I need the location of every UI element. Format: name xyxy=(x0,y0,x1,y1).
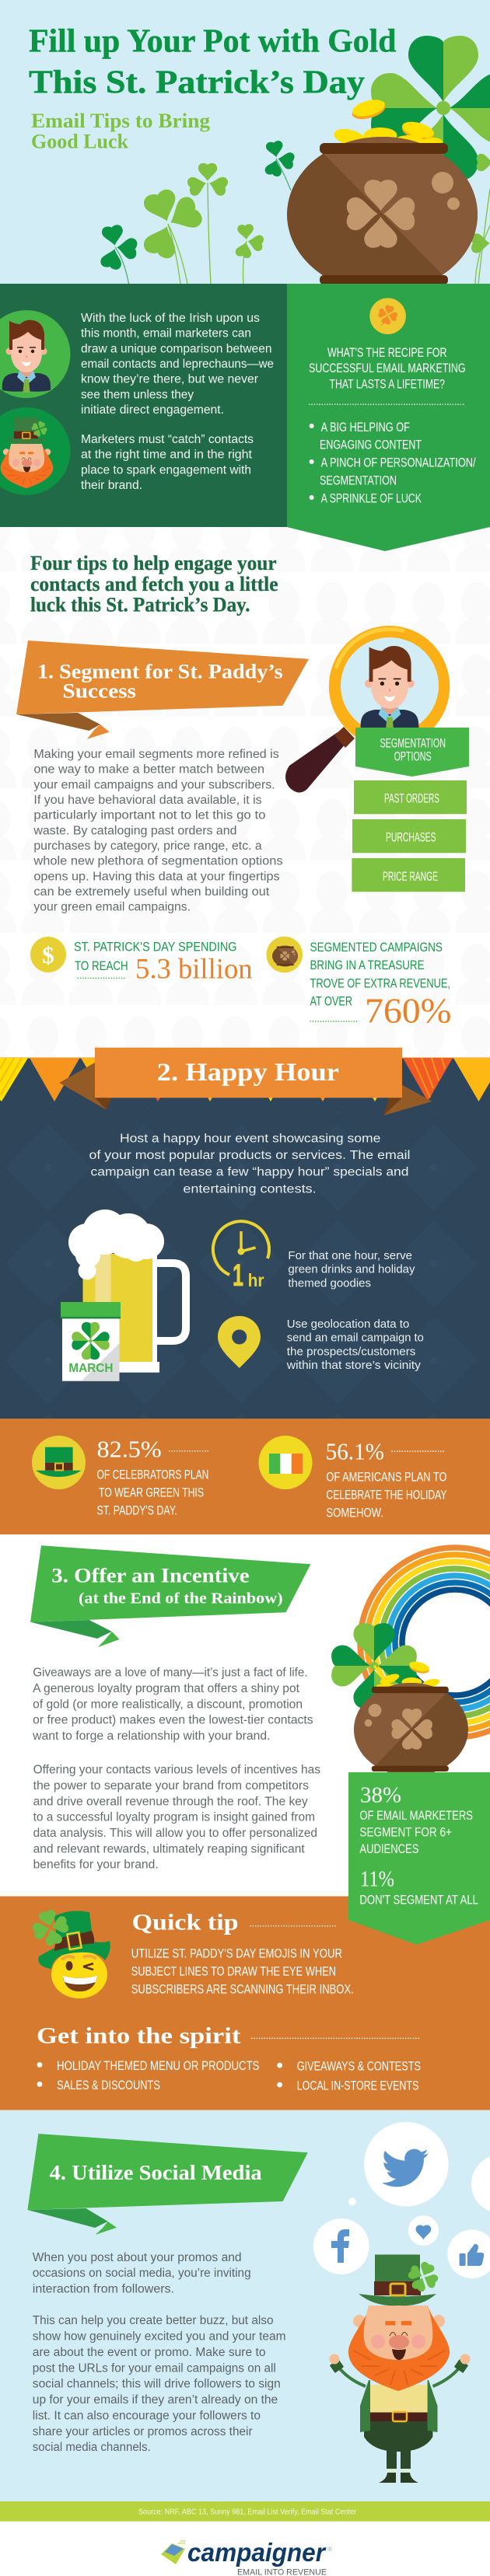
four tips heading xyxy=(30,552,278,616)
icon: heart bubble xyxy=(408,2215,439,2246)
ribbon: tip 2 heading xyxy=(59,1048,432,1115)
stat: 56.1% xyxy=(258,1436,446,1520)
panel: segmentation stats: SEGMENT FOR 6+ xyxy=(359,1825,452,1840)
option: purchases xyxy=(352,819,466,853)
icon: envelope xyxy=(161,2541,186,2564)
tip 1 body text xyxy=(33,748,283,914)
source strip: Source: NRF, ABC 13, Sunny 981, Email List Verify, Email Stat Center xyxy=(138,2508,357,2517)
ribbon: tip 1 heading: 1. Segment for St. Paddy’s xyxy=(37,661,283,683)
ribbon: tip 4 heading xyxy=(27,2134,308,2235)
stat: 82.5%: ST. PADDY'S DAY. xyxy=(96,1503,177,1517)
stat: 5.3 billion xyxy=(30,937,253,985)
option: price range xyxy=(352,858,465,892)
text: one hour: themed goodies xyxy=(288,1277,371,1290)
subtitle xyxy=(31,110,210,153)
title: Fill up Your Pot with Gold xyxy=(29,24,397,60)
bunting flags xyxy=(0,1058,490,1101)
text: geolocation: within that store’s vicinity xyxy=(286,1360,422,1372)
icon: one hour clock: hr xyxy=(248,1270,264,1290)
option: past orders: PAST ORDERS xyxy=(384,791,439,806)
intro text: see them unless they xyxy=(81,388,194,401)
get into the spirit xyxy=(37,2023,421,2093)
icon: green hat xyxy=(32,1436,86,1489)
stat: 5.3 billion: 5.3 billion xyxy=(135,953,253,985)
tip 4 body text: occasions on social media, you’re inviting xyxy=(33,2267,251,2280)
icon: winking emoji with hat xyxy=(30,1907,110,1998)
text: geolocation: the prospects/customers xyxy=(287,1346,415,1358)
avatar: marketer xyxy=(0,310,70,398)
panel: social media xyxy=(0,2110,490,2501)
ribbon: tip 2 heading: 2. Happy Hour xyxy=(157,1059,339,1087)
text: geolocation: send an email campaign to xyxy=(287,1332,424,1345)
stat: 5.3 billion: TO REACH xyxy=(75,958,128,973)
intro text: Marketers must “catch” contacts xyxy=(81,433,254,446)
tip 3 body text: benefits for your brand. xyxy=(33,1859,159,1872)
illustration: rainbow and pot xyxy=(331,1548,490,1776)
background pattern of silhouettes xyxy=(0,527,490,1058)
tip 4 body text: When you post about your promos and xyxy=(33,2251,242,2264)
recipe question: WHAT'S THE RECIPE FOR xyxy=(327,345,446,360)
tip 3 body text: or free product) makes even the lowest-tier contacts xyxy=(33,1714,313,1727)
title: This St. Patrick’s Day xyxy=(29,65,365,100)
tip 3 body text: to a successful loyalty program is insight gained from xyxy=(33,1811,315,1824)
stat: 760% xyxy=(266,937,451,1030)
text: one hour: green drinks and holiday xyxy=(288,1264,415,1276)
stat: 760%: BRING IN A TREASURE xyxy=(310,958,425,972)
campaigner logo: campaigner xyxy=(187,2538,327,2567)
options heading tag xyxy=(355,728,469,777)
four tips heading: Four tips to help engage your xyxy=(30,552,277,574)
tip 1 body text: particularly important not to let this go to xyxy=(33,809,266,822)
panel: segmentation stats: AUDIENCES xyxy=(359,1841,418,1856)
pot xyxy=(350,1678,468,1776)
tip 4 body text: interaction from followers. xyxy=(33,2282,174,2296)
tip 1 body text: Making your email segments more refined is xyxy=(33,748,279,761)
tip 4 body text: social channels; this will drive followers to sign xyxy=(33,2378,281,2391)
icon: march calendar: MARCH xyxy=(68,1362,113,1375)
tip 1 body text: purchases by category, price range, etc. a xyxy=(33,839,262,853)
recipe list: A BIG HELPING OF xyxy=(321,420,410,435)
icon: facebook bubble xyxy=(313,2218,369,2274)
rainbow xyxy=(360,1548,490,1737)
tip 2 intro text xyxy=(89,1132,411,1196)
stat: 56.1%: 56.1% xyxy=(326,1437,384,1464)
recipe list xyxy=(310,420,476,506)
panel: segmentation stats xyxy=(348,1772,490,1945)
tip 2 intro text: entertaining contests. xyxy=(183,1182,317,1196)
stat: 760%: 760% xyxy=(365,990,451,1030)
ribbon: tip 4 heading: 4. Utilize Social Media xyxy=(50,2161,262,2184)
get into the spirit: SALES & DISCOUNTS xyxy=(57,2078,160,2093)
tip 4 body text: up for your emails if they aren’t already on the xyxy=(33,2393,278,2407)
intro text: know they’re there, but we never xyxy=(81,373,258,386)
stat: 82.5% xyxy=(32,1435,208,1517)
icon: dollar coin xyxy=(30,937,66,972)
tip 2 intro text: campaign can tease a few “happy hour” specials and xyxy=(90,1166,409,1179)
text: geolocation: Use geolocation data to xyxy=(287,1318,409,1331)
ribbon: tip 3 heading: (at the End of the Rainbow) xyxy=(79,1590,283,1607)
text: geolocation xyxy=(286,1318,424,1372)
get into the spirit: LOCAL IN-STORE EVENTS xyxy=(297,2079,418,2093)
intro text: initiate direct engagement. xyxy=(81,403,224,417)
tip 3 body text: and relevant rewards, ultimately reaping significant xyxy=(33,1842,305,1855)
option: past orders xyxy=(354,780,467,814)
tip 3 body text: A generous loyalty program that offers a shiny pot xyxy=(33,1682,300,1695)
tip 1 body text: can be extremely useful when building out xyxy=(33,885,270,899)
pot of gold xyxy=(287,129,484,292)
panel: happy hour xyxy=(0,1048,490,1419)
small shamrocks xyxy=(100,140,490,284)
four tips heading: contacts and fetch you a little xyxy=(30,573,278,595)
tip 4 body text: list. It can also encourage your followers to xyxy=(33,2409,261,2422)
recipe list: SEGMENTATION xyxy=(320,473,397,488)
clover xyxy=(331,1623,417,1709)
panel: segmentation stats: 38% xyxy=(360,1783,401,1807)
icon: thumbs up bubble xyxy=(447,2229,490,2278)
recipe question: THAT LASTS A LIFETIME? xyxy=(330,377,445,392)
tip 2 intro text: Host a happy hour event showcasing some xyxy=(120,1132,380,1145)
stat: 56.1%: CELEBRATE THE HOLIDAY xyxy=(326,1487,446,1502)
subtitle: Email Tips to Bring xyxy=(31,110,210,132)
option: purchases: PURCHASES xyxy=(386,829,436,844)
tip 1 body text: If you have behavioral data available, it is xyxy=(33,794,262,807)
recipe list: ENGAGING CONTENT xyxy=(320,438,422,452)
tip 1 body text: one way to make a better match between xyxy=(33,763,264,777)
icon: dollar coin: $ xyxy=(42,941,54,969)
ribbon: tip 3 heading xyxy=(30,1545,310,1647)
tip 3 body text: of gold (or more realistically, a discount, promotion xyxy=(33,1698,303,1711)
intro text: draw a unique comparison between xyxy=(81,342,272,355)
get into the spirit: HOLIDAY THEMED MENU OR PRODUCTS xyxy=(57,2058,260,2073)
segmentation options xyxy=(352,728,469,892)
stat: 760%: AT OVER xyxy=(310,993,352,1008)
stat: 82.5%: OF CELEBRATORS PLAN xyxy=(96,1467,208,1482)
tip 4 body text: post the URLs for your email campaigns on all xyxy=(33,2361,276,2375)
options heading tag: OPTIONS xyxy=(394,749,432,763)
get into the spirit: Get into the spirit xyxy=(37,2023,240,2049)
icon: one hour clock: 1 xyxy=(233,1258,243,1293)
tip 4 body text: share your articles or promos across their xyxy=(33,2425,253,2438)
intro text: at the right time and in the right xyxy=(81,449,253,462)
four tips heading: luck this St. Patrick’s Day. xyxy=(30,594,250,616)
intro panel: left xyxy=(0,284,287,527)
quick tip: SUBJECT LINES TO DRAW THE EYE WHEN xyxy=(131,1964,336,1979)
intro text xyxy=(81,312,274,492)
icon: location pin xyxy=(218,1316,261,1368)
tip 4 body text: This can help you create better buzz, but also xyxy=(33,2314,274,2327)
intro text: email contacts and leprechauns—we xyxy=(81,358,274,371)
tip 3 body text: Giveaways are a love of many—it’s just a fact of life. xyxy=(33,1667,308,1680)
tip 3 body text: want to forge a relationship with your brand. xyxy=(32,1730,270,1743)
intro text: this month, email marketers can xyxy=(81,327,251,340)
tip 3 body text: the power to separate your brand from competitors xyxy=(33,1779,309,1792)
illustration: leprechaun xyxy=(330,2254,470,2483)
tip 1 body text: whole new plethora of segmentation options xyxy=(33,855,283,868)
tip 4 body text: are about the event or promo. Make sure to xyxy=(33,2346,266,2359)
subtitle: Good Luck xyxy=(31,131,129,153)
intro panel: recipe xyxy=(287,284,490,551)
tip 4 body text xyxy=(33,2251,286,2454)
source strip xyxy=(0,2501,490,2522)
ribbon: tip 1 heading xyxy=(16,641,309,739)
tip 1 body text: your email campaigns and your subscribers. xyxy=(33,778,275,791)
coins xyxy=(374,1660,440,1690)
title xyxy=(29,24,397,100)
ribbon: tip 1 heading: Success xyxy=(62,680,136,703)
icon: gold clover coin xyxy=(369,298,406,334)
recipe list: A SPRINKLE OF LUCK xyxy=(321,491,422,506)
intro text: With the luck of the Irish upon us xyxy=(81,312,260,325)
icon: magnifying glass xyxy=(285,626,450,793)
tip 3 body text: data analysis. This will allow you to offer personalized xyxy=(33,1827,317,1840)
icon: twitter bubble xyxy=(364,2122,449,2206)
options heading tag: SEGMENTATION xyxy=(380,736,446,751)
icon: march calendar xyxy=(61,1302,121,1381)
text: one hour xyxy=(288,1250,415,1290)
option: price range: PRICE RANGE xyxy=(383,869,438,884)
icon: one hour clock xyxy=(213,1221,269,1293)
tip 3 body text xyxy=(32,1667,320,1872)
tip 4 body text: show how genuinely excited you and your team xyxy=(33,2330,286,2344)
recipe question xyxy=(309,345,466,392)
icon: pot coin xyxy=(266,937,303,972)
get into the spirit: GIVEAWAYS & CONTESTS xyxy=(297,2059,421,2074)
quick tip: UTILIZE ST. PADDY'S DAY EMOJIS IN YOUR xyxy=(131,1946,342,1961)
decorative bubble at edge xyxy=(471,2155,490,2214)
tip 2 intro text: of your most popular products or services. The email xyxy=(89,1149,411,1162)
tip 3 body text: Offering your contacts various levels of incentives has xyxy=(33,1764,320,1777)
campaigner logo xyxy=(161,2538,332,2576)
stat: 82.5%: 82.5% xyxy=(96,1435,162,1462)
quick tip: SUBSCRIBERS ARE SCANNING THEIR INBOX. xyxy=(131,1982,354,1997)
quick tip: Quick tip xyxy=(132,1909,239,1935)
tip 1 body text: waste. By cataloging past orders and xyxy=(33,824,237,837)
tip 1 body text: your green email campaigns. xyxy=(33,901,191,914)
panel: segmentation stats: 11% xyxy=(360,1868,394,1892)
stat: 56.1%: SOMEHOW. xyxy=(326,1505,383,1520)
campaigner logo: ® xyxy=(327,2546,332,2553)
stat: 760%: SEGMENTED CAMPAIGNS xyxy=(310,940,443,955)
tip 1 body text: opens up. Having this data at your fingertips xyxy=(33,870,280,883)
tip 3 body text: and drive overall revenue through the roof. The key xyxy=(33,1795,308,1808)
text: one hour: For that one hour, serve xyxy=(288,1250,412,1262)
stat: 56.1%: OF AMERICANS PLAN TO xyxy=(326,1469,446,1484)
orange quick tip band xyxy=(0,1897,490,2110)
icon: Irish flag xyxy=(258,1436,313,1489)
tip 4 body text: social media channels. xyxy=(33,2441,151,2454)
panel: orange stats band xyxy=(0,1419,490,1534)
icon: beer mug xyxy=(68,1209,186,1373)
big four-leaf clover xyxy=(371,36,490,180)
stat: 82.5%: TO WEAR GREEN THIS xyxy=(99,1485,204,1499)
quick tip xyxy=(131,1909,354,1997)
intro text: place to spark engagement with xyxy=(81,463,251,476)
stat: 5.3 billion: ST. PATRICK'S DAY SPENDING xyxy=(74,939,236,954)
gold coins xyxy=(332,96,443,149)
avatar: leprechaun xyxy=(0,407,70,495)
small bubble xyxy=(348,2197,356,2205)
intro text: their brand. xyxy=(81,479,142,492)
header panel xyxy=(0,0,490,292)
ribbon: tip 3 heading: 3. Offer an Incentive xyxy=(51,1564,250,1586)
